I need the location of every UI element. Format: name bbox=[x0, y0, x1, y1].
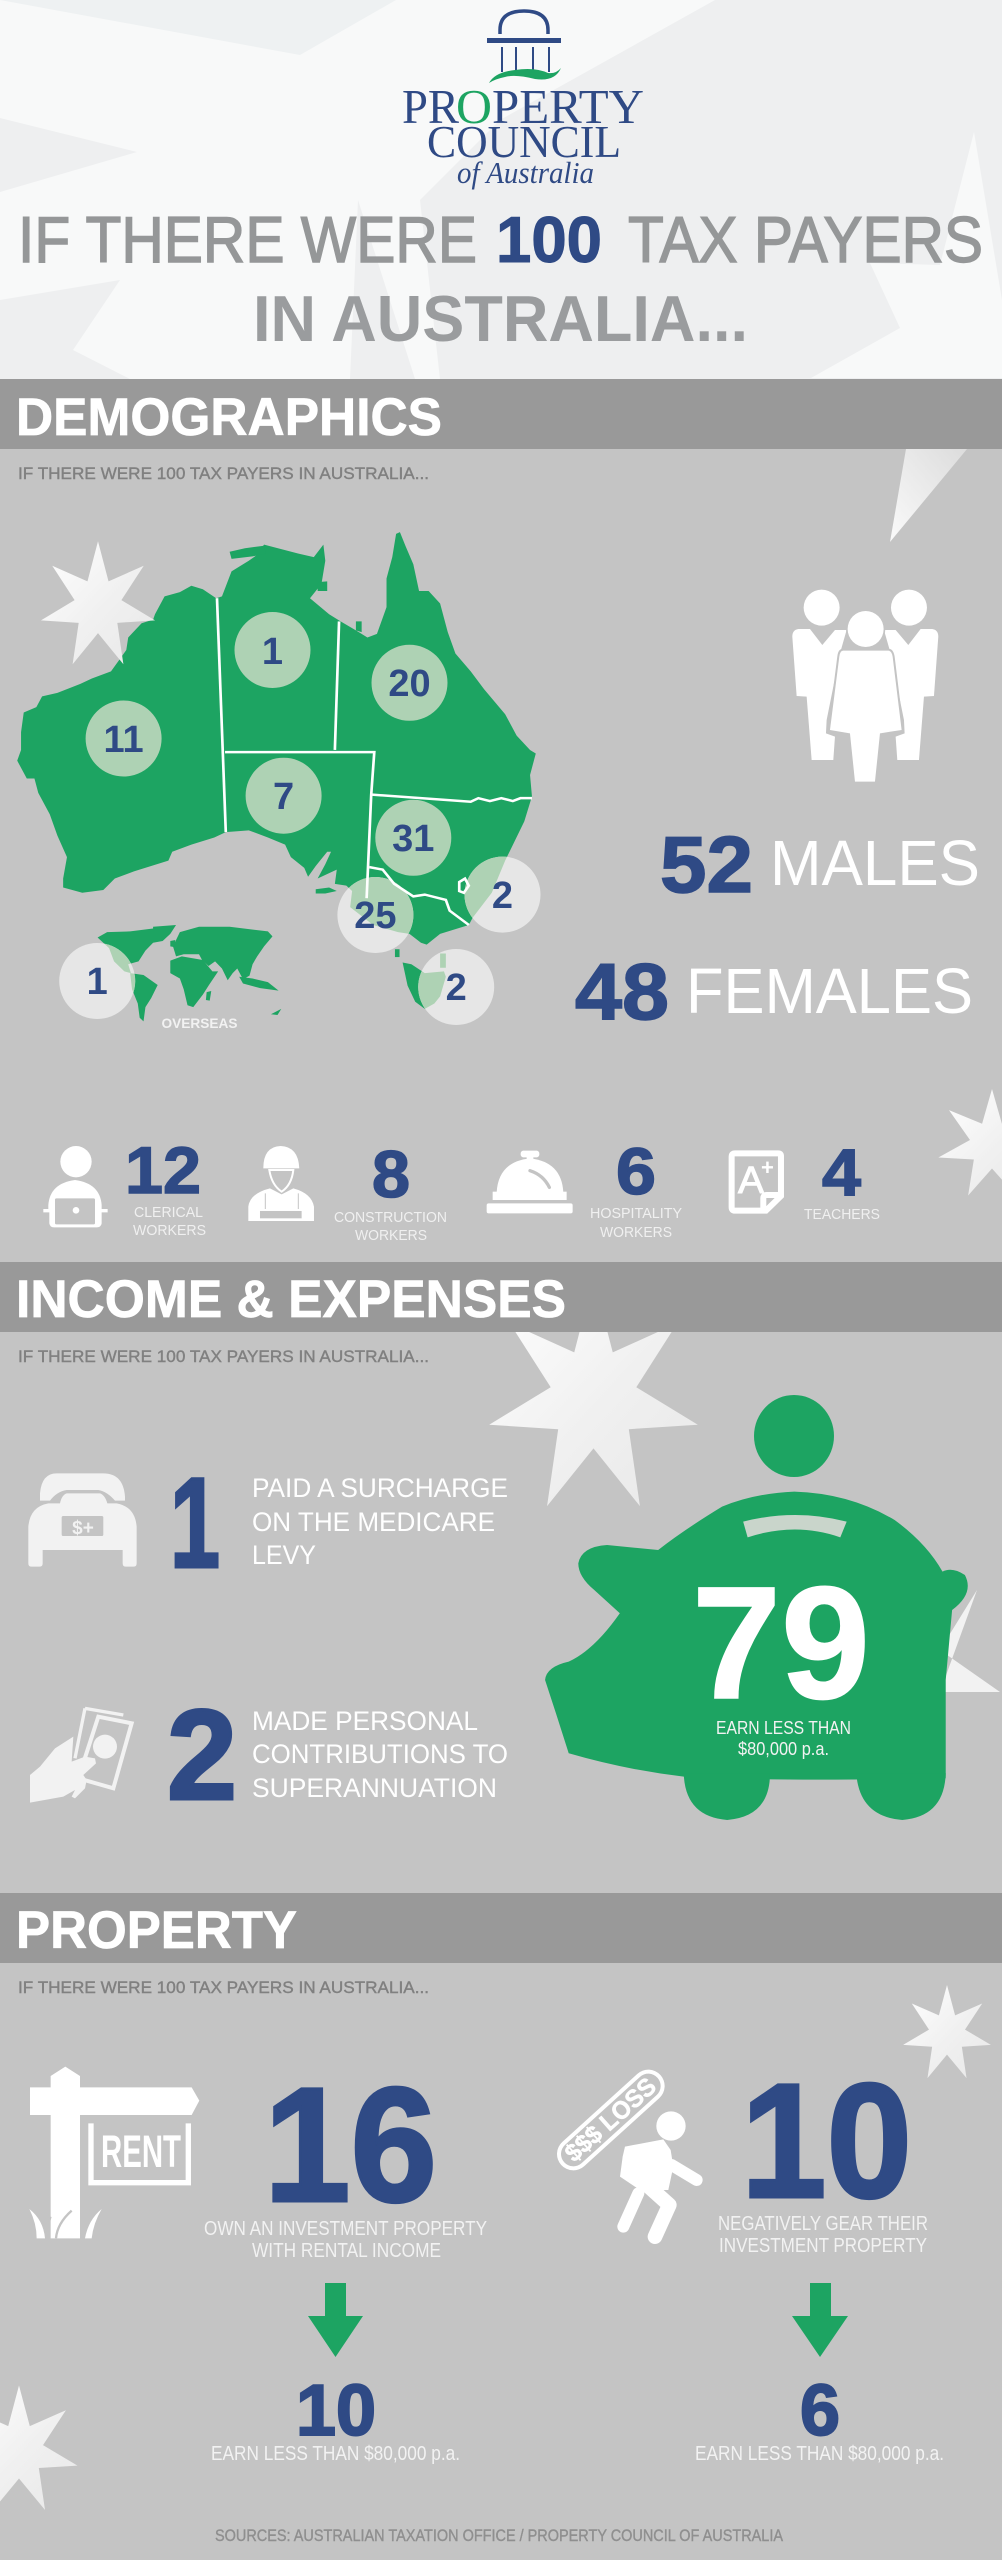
piggy bank with 79 stat: EARN LESS THAN bbox=[716, 1718, 851, 1738]
logo: Property Council of Australia bbox=[402, 11, 644, 190]
logo: Property Council of Australia: PR bbox=[402, 79, 459, 134]
stat: males: 52 bbox=[660, 820, 753, 909]
stat: negatively geared under 80k: 6 bbox=[800, 2371, 840, 2451]
stat: hospitality workers bbox=[590, 1134, 682, 1241]
stat: medicare levy surcharge: ON THE MEDICARE bbox=[252, 1507, 495, 1537]
stat: hospitality workers: HOSPITALITY bbox=[590, 1205, 682, 1222]
state counts: 11 bbox=[104, 719, 144, 761]
stat: construction workers: WORKERS bbox=[355, 1227, 427, 1244]
title: 100 bbox=[496, 203, 602, 276]
piggy bank with 79 stat: $80,000 p.a. bbox=[738, 1739, 829, 1759]
pig leg: left bbox=[684, 1773, 770, 1820]
section band: demographics: DEMOGRAPHICS bbox=[16, 388, 442, 447]
state counts: 1 bbox=[262, 631, 283, 673]
section band: property bbox=[0, 1893, 1002, 1963]
stat: negatively geared: NEGATIVELY GEAR THEIR bbox=[718, 2213, 928, 2235]
state counts: 1 bbox=[87, 961, 108, 1003]
logo: Property Council of Australia: PERTY bbox=[492, 79, 644, 134]
stat: negatively geared under 80k bbox=[695, 2371, 944, 2465]
icon: graded paper: + bbox=[761, 1155, 774, 1180]
section band: demographics bbox=[0, 379, 1002, 449]
stat: clerical workers: WORKERS bbox=[133, 1222, 206, 1239]
icon: rent sign bbox=[29, 2067, 199, 2238]
stat: superannuation contributions: CONTRIBUTIONS TO bbox=[252, 1739, 508, 1769]
state borders bbox=[217, 598, 532, 925]
logo: Property Council of Australia: of Australia bbox=[457, 155, 594, 190]
title: IN AUSTRALIA... bbox=[253, 282, 748, 355]
stat: construction workers bbox=[334, 1137, 447, 1244]
map circles bbox=[59, 857, 540, 1025]
sources: SOURCES: AUSTRALIAN TAXATION OFFICE / PROPERTY COUNCIL OF AUSTRALIA bbox=[215, 2526, 784, 2545]
arrow: left bbox=[308, 2283, 363, 2357]
overseas label: OVERSEAS bbox=[162, 1015, 238, 1031]
stat: medicare levy surcharge: LEVY bbox=[252, 1540, 316, 1570]
state counts: 2 bbox=[492, 875, 513, 917]
state counts bbox=[87, 631, 513, 1009]
stat: females bbox=[575, 947, 973, 1036]
decorative star: right jobs bbox=[938, 1089, 1002, 1195]
icon: graded paper: A bbox=[738, 1160, 765, 1202]
icon: person carrying loss sign: $$$ LOSS bbox=[560, 2072, 662, 2168]
section band: income and expenses: INCOME & EXPENSES bbox=[16, 1270, 566, 1329]
stat: negatively geared: INVESTMENT PROPERTY bbox=[719, 2235, 927, 2257]
pig body bbox=[545, 1492, 968, 1820]
state counts: 2 bbox=[446, 967, 467, 1009]
decorative star: property bbox=[903, 1985, 991, 2078]
stat: clerical workers bbox=[125, 1133, 206, 1239]
icon: construction worker bbox=[248, 1146, 314, 1221]
section subhead: demographics: IF THERE WERE 100 TAX PAYERS IN AUSTRALIA... bbox=[18, 464, 429, 483]
decorative star: map bbox=[41, 541, 155, 664]
stat: males bbox=[660, 820, 980, 909]
logo: Property Council of Australia: COUNCIL bbox=[427, 116, 621, 167]
title: IF THERE WERE bbox=[18, 203, 477, 276]
icon: hospitality bell bbox=[487, 1151, 573, 1213]
icon: hand holding money bbox=[30, 1708, 132, 1803]
decorative star: bottom left bbox=[0, 2386, 77, 2510]
section subhead: income: IF THERE WERE 100 TAX PAYERS IN AUSTRALIA... bbox=[18, 1347, 429, 1366]
stat: superannuation contributions bbox=[167, 1684, 508, 1827]
stat: rental property owners: OWN AN INVESTMENT PROPERTY bbox=[204, 2218, 487, 2240]
section band: property: PROPERTY bbox=[16, 1901, 297, 1960]
map landmass bbox=[17, 532, 536, 1021]
stat: superannuation contributions: MADE PERSONAL bbox=[252, 1706, 478, 1736]
stat: construction workers: 8 bbox=[372, 1137, 410, 1211]
stat: superannuation contributions: SUPERANNUATION bbox=[252, 1773, 497, 1803]
piggy bank with 79 stat bbox=[545, 1395, 968, 1820]
stat: teachers: TEACHERS bbox=[804, 1206, 880, 1223]
header background bbox=[0, 0, 1002, 379]
stat: rental property owners: WITH RENTAL INCOME bbox=[252, 2240, 441, 2262]
logo: Property Council of Australia: O bbox=[456, 79, 492, 134]
map: Australia and world with state counts bbox=[17, 532, 541, 1031]
stat: negatively geared: 10 bbox=[741, 2049, 912, 2232]
coin bbox=[754, 1395, 834, 1477]
stat: medicare levy surcharge bbox=[170, 1452, 508, 1595]
state counts: 20 bbox=[388, 663, 431, 705]
stat: teachers: 4 bbox=[822, 1135, 861, 1209]
stat: rental owners under 80k: 10 bbox=[296, 2371, 376, 2451]
map circle overlap tint bbox=[86, 612, 507, 1009]
icon: rent sign: RENT bbox=[101, 2126, 181, 2177]
stat: females: FEMALES bbox=[686, 955, 973, 1027]
stat: superannuation contributions: 2 bbox=[167, 1684, 237, 1827]
coin slot bbox=[743, 1515, 847, 1537]
stat: males: MALES bbox=[770, 827, 980, 899]
icon: people group bbox=[792, 590, 938, 782]
state counts: 31 bbox=[392, 818, 434, 860]
decorative star: top right bbox=[890, 449, 967, 542]
stat: rental owners under 80k bbox=[211, 2371, 460, 2465]
icon: graded paper bbox=[732, 1153, 781, 1211]
stat: rental property owners: 16 bbox=[264, 2053, 437, 2236]
state counts: 7 bbox=[273, 776, 294, 818]
stat: construction workers: CONSTRUCTION bbox=[334, 1209, 447, 1226]
decorative star: income bbox=[489, 1278, 698, 1506]
icon: bed with medicare levy bbox=[28, 1473, 137, 1567]
stat: teachers bbox=[804, 1135, 880, 1223]
arrow: right bbox=[792, 2283, 848, 2357]
section band: income and expenses bbox=[0, 1262, 1002, 1332]
stat: females: 48 bbox=[575, 947, 669, 1036]
logo icon: portico bbox=[487, 11, 561, 83]
stat: clerical workers: 12 bbox=[125, 1133, 201, 1207]
pig leg: right bbox=[856, 1773, 946, 1820]
stat: medicare levy surcharge: 1 bbox=[170, 1452, 220, 1595]
stat: clerical workers: CLERICAL bbox=[134, 1204, 203, 1221]
section subhead: property: IF THERE WERE 100 TAX PAYERS IN AUSTRALIA... bbox=[18, 1978, 429, 1997]
stat: hospitality workers: WORKERS bbox=[600, 1224, 672, 1241]
icon: person carrying loss sign bbox=[560, 2072, 697, 2237]
stat: medicare levy surcharge: PAID A SURCHARGE bbox=[252, 1473, 508, 1503]
stat: hospitality workers: 6 bbox=[616, 1134, 656, 1208]
stat: rental property owners bbox=[204, 2053, 487, 2262]
icon: bed with medicare levy: $+ bbox=[72, 1518, 94, 1539]
decorative star: behind piggy bank bbox=[940, 1590, 1000, 1692]
stat: negatively geared under 80k: EARN LESS THAN $80,000 p.a. bbox=[695, 2443, 944, 2465]
stat: rental owners under 80k: EARN LESS THAN $80,000 p.a. bbox=[211, 2443, 460, 2465]
icon: clerical worker bbox=[43, 1146, 108, 1227]
title bbox=[18, 203, 983, 355]
state counts: 25 bbox=[354, 895, 397, 937]
piggy bank with 79 stat: 79 bbox=[692, 1553, 870, 1732]
